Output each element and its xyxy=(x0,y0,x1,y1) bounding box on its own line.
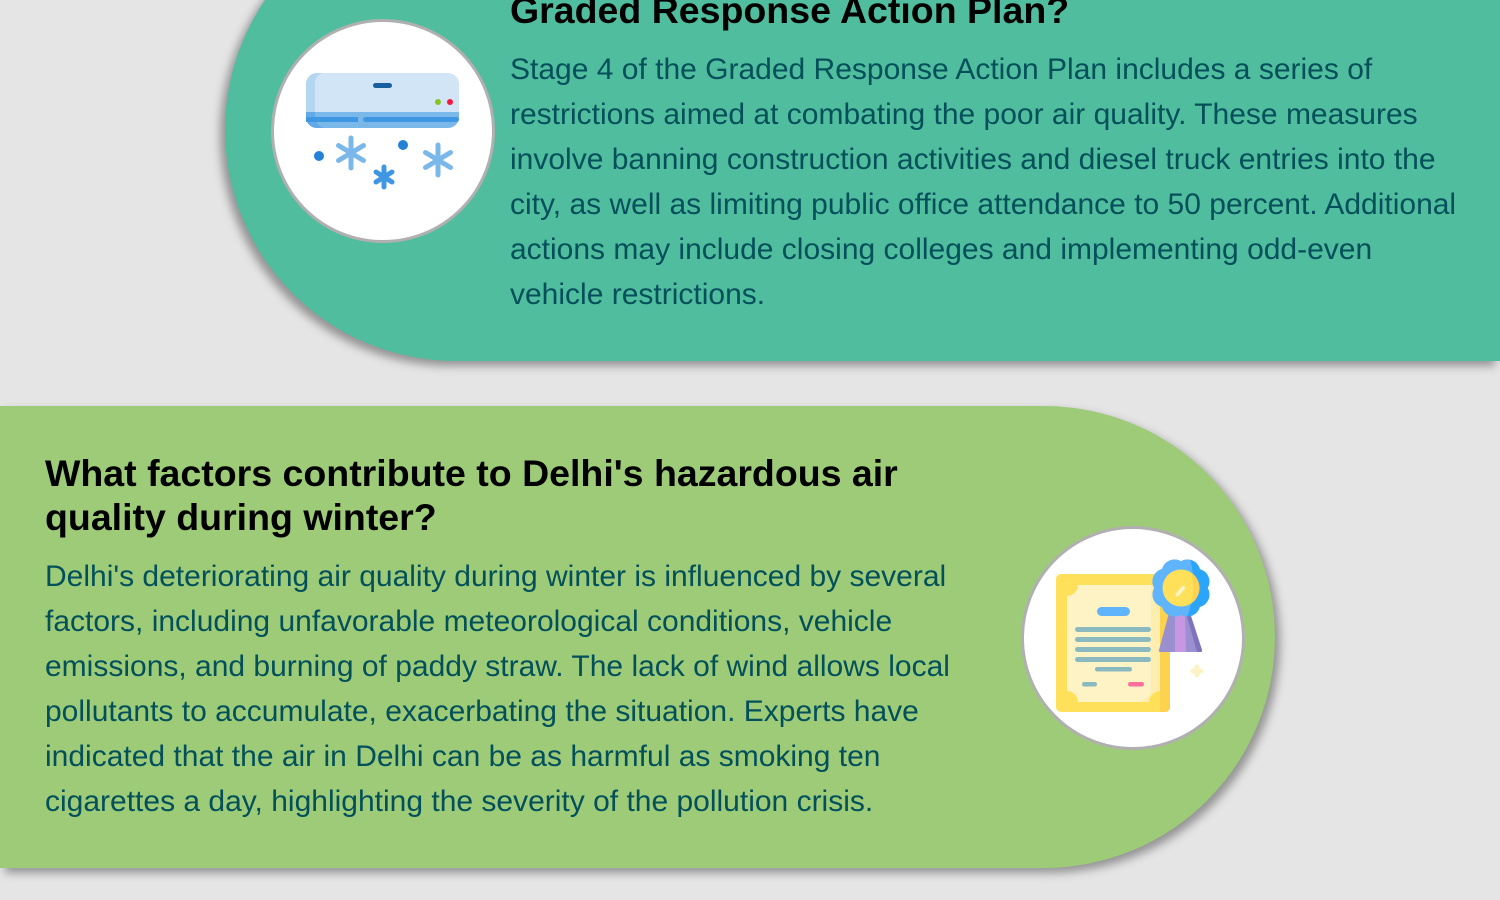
text block: answer 1: restrictions aimed at combating the poor air quality. These measures xyxy=(510,98,1418,131)
text block: answer 2: emissions, and burning of paddy straw. The lack of wind allows local xyxy=(45,650,950,683)
text block: answer 1: Stage 4 of the Graded Response Action Plan includes a series of xyxy=(510,53,1372,86)
text block: answer 1: city, as well as limiting public office attendance to 50 percent. Additional xyxy=(510,188,1456,221)
text block: answer 1 xyxy=(510,53,1456,311)
panel: Stage 4 Graded Response Action Plan xyxy=(225,0,1500,361)
text block: answer 2 xyxy=(45,560,950,818)
icon: air conditioner with snowflakes xyxy=(270,18,494,242)
text block: answer 2: indicated that the air in Delhi can be as harmful as smoking ten xyxy=(45,740,880,773)
text block: answer 1: actions may include closing colleges and implementing odd-even xyxy=(510,233,1372,266)
heading: question 2: quality during winter? xyxy=(45,496,437,538)
panel: factors behind hazardous winter air xyxy=(0,406,1275,868)
text block: answer 2: Delhi's deteriorating air quality during winter is influenced by several xyxy=(45,560,946,593)
heading: question 2 xyxy=(45,452,898,538)
text block: answer 2: pollutants to accumulate, exacerbating the situation. Experts have xyxy=(45,695,919,728)
heading: question 2: What factors contribute to Delhi's hazardous air xyxy=(45,452,898,494)
icon: certificate with rosette xyxy=(1021,526,1245,750)
text block: answer 2: cigarettes a day, highlighting the severity of the pollution crisis. xyxy=(45,785,873,818)
text block: answer 1: vehicle restrictions. xyxy=(510,278,765,311)
text block: answer 1: involve banning construction activities and diesel truck entries into the xyxy=(510,143,1436,176)
text block: answer 2: factors, including unfavorable meteorological conditions, vehicle xyxy=(45,605,892,638)
